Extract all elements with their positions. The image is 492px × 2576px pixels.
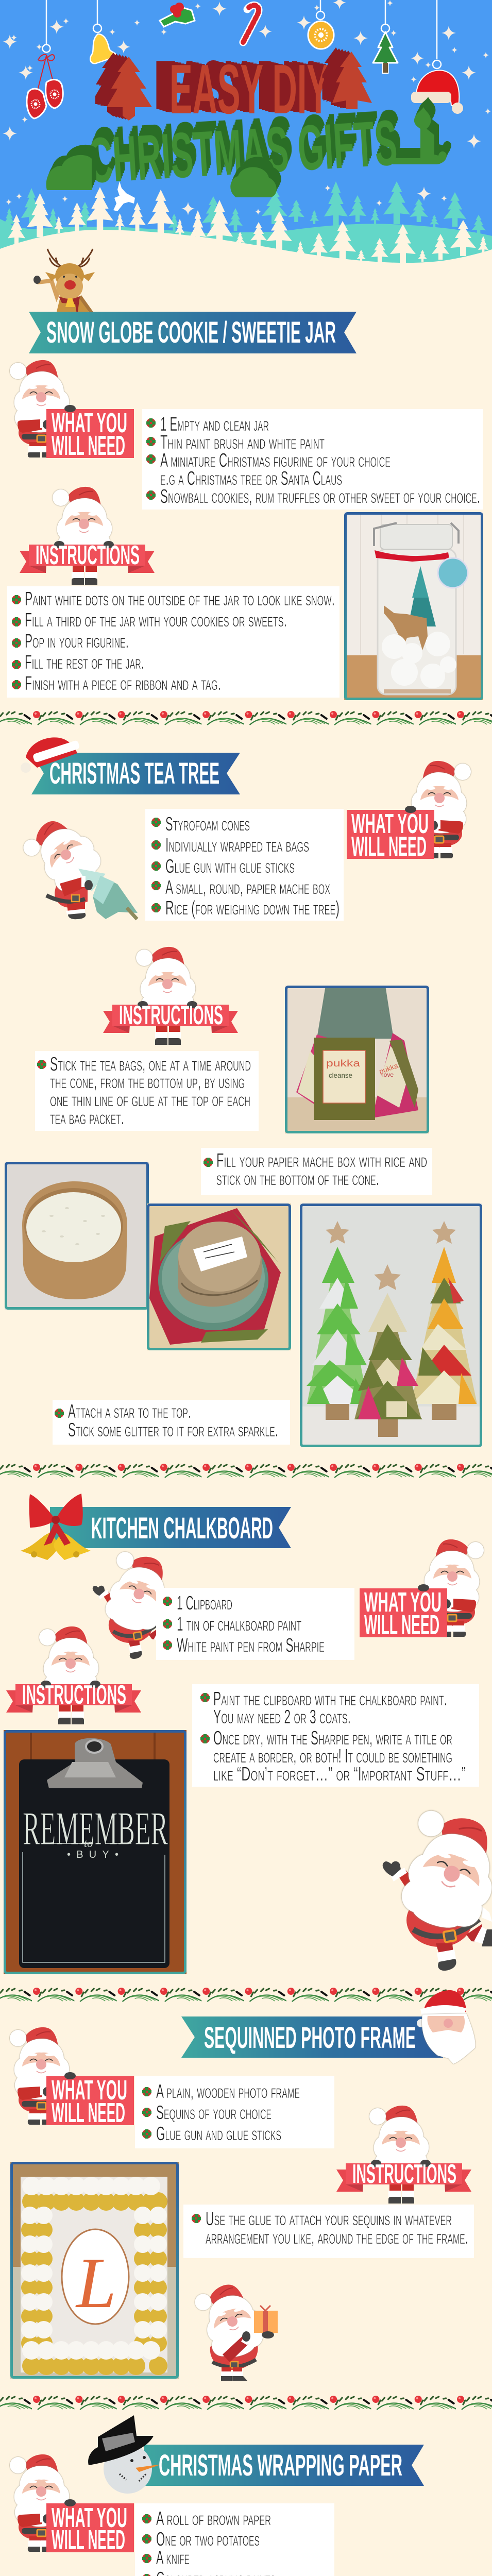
section banner: sequinned photo frame: [181, 1990, 476, 2064]
list item: [192, 2208, 468, 2248]
list item: [12, 609, 287, 631]
panel: chalkboard instructions: [192, 1684, 479, 1787]
list item: 1 Empty and clean jar: [160, 414, 269, 435]
list item: A small, round, papier mache box: [165, 877, 330, 899]
list item: Fill the rest of the jar.: [25, 652, 144, 673]
teal background forest: [0, 181, 492, 270]
photo: sequinned frame: L: [75, 2243, 116, 2323]
list item: Fill a third of the jar with your cookies or sweets.: [25, 609, 287, 631]
title: Easy DIY Christmas Gifts: [46, 50, 447, 197]
santa: instructions 1: [20, 487, 155, 585]
icon: tree ornament: [373, 0, 398, 73]
list item: [200, 1727, 466, 1785]
santa: what you will need 2: [347, 761, 471, 862]
list item: [12, 631, 129, 652]
photo: tea bags on cone: pukka: [326, 1058, 361, 1069]
list item: [142, 2529, 260, 2550]
list item: [142, 2568, 276, 2576]
santa: instructions 3: [6, 1626, 141, 1724]
list item: [12, 652, 144, 673]
list item: Attach a star to the top.: [68, 1401, 191, 1422]
icon: rudolph: [33, 249, 100, 325]
santa waving large: [383, 1803, 492, 1971]
list item: [12, 588, 335, 610]
list item: stick on the bottom of the cone.: [216, 1168, 379, 1190]
section banner: tea tree: [21, 737, 240, 794]
santa blowing on a tree: [19, 808, 138, 919]
cream snowy trees: [8, 187, 488, 263]
list item: [151, 856, 295, 877]
list item: One or two potatoes: [156, 2529, 260, 2550]
divider garland: [0, 708, 492, 725]
label: INSTRUCTIONS: [36, 540, 140, 570]
list item: [146, 450, 391, 489]
santa: what you will need 5: [10, 2454, 134, 2555]
santa: what you will need 4: WILL NEED: [52, 2097, 125, 2128]
santa: instructions 2: [103, 947, 238, 1045]
icon: santa hat ornament: [411, 0, 463, 114]
santa: what you will need 4: [10, 2027, 134, 2128]
list item: [163, 1592, 232, 1614]
list item: Rice (for weighing down the tree): [165, 897, 340, 919]
santa waving small: [93, 1547, 179, 1659]
icon: candy cane: [243, 5, 259, 42]
list item: [142, 2123, 281, 2145]
sparkles: [3, 0, 491, 215]
list item: 1 Clipboard: [177, 1592, 232, 1614]
panel: chalkboard materials: [156, 1588, 354, 1660]
list item: [163, 1635, 325, 1656]
tree one: [307, 1221, 369, 1420]
list item: 1 tin of chalkboard paint: [177, 1614, 301, 1635]
label: INSTRUCTIONS: [22, 1680, 126, 1710]
icon: bells with bow: [21, 1494, 91, 1560]
list item: Glue gun and glue sticks: [156, 2123, 281, 2145]
header panel: winter sky: [0, 0, 492, 289]
list item: tea bag packet.: [50, 1107, 124, 1129]
photo: finished tea bag trees: [300, 1204, 482, 1447]
snowy hill: [0, 230, 492, 289]
panel: attach star instruction: [53, 1400, 290, 1445]
list item: [151, 835, 309, 856]
list item: [203, 1150, 427, 1190]
list item: White paint pen from Sharpie: [177, 1635, 325, 1656]
list item: [55, 1401, 278, 1441]
panel: fill box instruction: [201, 1148, 432, 1195]
icon: white leaping reindeer: [113, 181, 135, 211]
list item: [146, 414, 269, 435]
icon: santa hat: [21, 737, 80, 773]
list item: [146, 432, 325, 453]
list item: Glue gun with glue sticks: [165, 856, 295, 877]
section banner: kitchen chalkboard: [21, 1494, 291, 1560]
photo: chalkboard clipboard: •BUY•: [67, 1849, 118, 1860]
list item: [142, 2508, 271, 2530]
list item: A knife: [156, 2547, 190, 2569]
section banner: snow globe: [29, 312, 357, 353]
list item: Thin paint brush and white paint: [160, 432, 325, 453]
list item: [151, 897, 340, 919]
list item: [200, 1688, 447, 1728]
label: WHAT YOU: [52, 408, 127, 438]
list item: [151, 877, 330, 899]
banner title: KITCHEN CHALKBOARD: [91, 1512, 273, 1545]
list item: the cone, from the bottom up, by using: [50, 1071, 245, 1093]
list item: [142, 2102, 272, 2124]
panel: tea tree materials list: [145, 809, 344, 921]
list item: [37, 1054, 251, 1129]
icon: mittens ornament: [27, 0, 63, 118]
green bush centre: [230, 167, 277, 197]
photo: tea bags on cone: [285, 986, 429, 1133]
panel: wrapping paper materials: [135, 2503, 334, 2576]
list item: A roll of brown paper: [156, 2508, 271, 2530]
photo: box on foam cone base: [147, 1204, 291, 1350]
list item: [142, 2547, 190, 2569]
photo: tea bags on cone: love: [382, 1071, 394, 1078]
list item: [142, 2081, 300, 2103]
divider garland: [0, 2393, 492, 2410]
green bush left: [46, 155, 92, 190]
list item: Styrofoam cones: [165, 814, 250, 835]
panel: jar materials list: [142, 409, 483, 510]
list item: Stick some glitter to it for extra sparkle.: [68, 1419, 278, 1441]
divider garland: [0, 1461, 492, 1478]
list item: You may need 2 or 3 coats.: [213, 1706, 351, 1728]
list item: Indiviually wrapped tea bags: [165, 835, 309, 856]
divider garland: [0, 1985, 492, 2002]
red tree left: [107, 57, 152, 121]
banner title: CHRISTMAS TEA TREE: [49, 757, 219, 790]
label: WHAT YOU: [52, 2075, 127, 2106]
santa holding a gift: [192, 2278, 278, 2381]
list item: [151, 814, 250, 835]
photo: chalkboard clipboard: to: [84, 1837, 93, 1850]
santa: what you will need 3: [360, 1539, 484, 1640]
label: WHAT YOU: [52, 2502, 127, 2533]
section banner: christmas wrapping paper: [88, 2415, 424, 2494]
list item: one thin line of glue at the top of each: [50, 1089, 250, 1111]
list item: Pop in your figurine.: [25, 631, 129, 652]
santa: what you will need 5: WILL NEED: [52, 2524, 125, 2555]
photo: snow globe jar: [344, 512, 483, 700]
photo: rice box: [5, 1162, 149, 1310]
panel: frame instructions: [183, 2205, 474, 2258]
icon: bell ornament: [90, 0, 116, 63]
photo: tea bags on cone: pukka: [378, 1061, 399, 1076]
list item: [12, 673, 221, 694]
label: INSTRUCTIONS: [119, 1001, 223, 1030]
panel: jar instructions: [7, 586, 340, 698]
list item: [163, 1614, 301, 1635]
red tree right: [332, 52, 372, 109]
tree two: [354, 1264, 422, 1437]
santa: instructions 4: [336, 2106, 471, 2204]
icon: snowman head: [88, 2415, 162, 2494]
photo: chalkboard clipboard: [4, 1730, 186, 1974]
photo: tea bags on cone: cleanse: [329, 1071, 352, 1079]
panel: frame materials: [135, 2076, 334, 2148]
list item: A plain, wooden photo frame: [156, 2081, 300, 2103]
list item: e.g a Christmas tree or Santa Claus: [160, 468, 342, 489]
green sleigh right: [393, 107, 447, 164]
list item: Stick the tea bags, one at a time around: [50, 1054, 251, 1075]
photo: sequinned frame: [10, 2162, 179, 2379]
panel: tea bag instructions: [35, 1051, 259, 1131]
title: Easy DIY Christmas Gifts: EASY DIY: [169, 50, 330, 128]
santa: what you will need 1: WILL NEED: [52, 430, 125, 461]
icon: gold bauble: [308, 0, 334, 49]
tree three: [411, 1221, 477, 1420]
icon: santa head: [417, 1990, 476, 2064]
list item: Finish with a piece of ribbon and a tag.: [25, 673, 221, 694]
list item: Sequins of your choice: [156, 2102, 272, 2124]
icon: holly: [160, 3, 195, 27]
santa: what you will need 1: [10, 360, 134, 461]
